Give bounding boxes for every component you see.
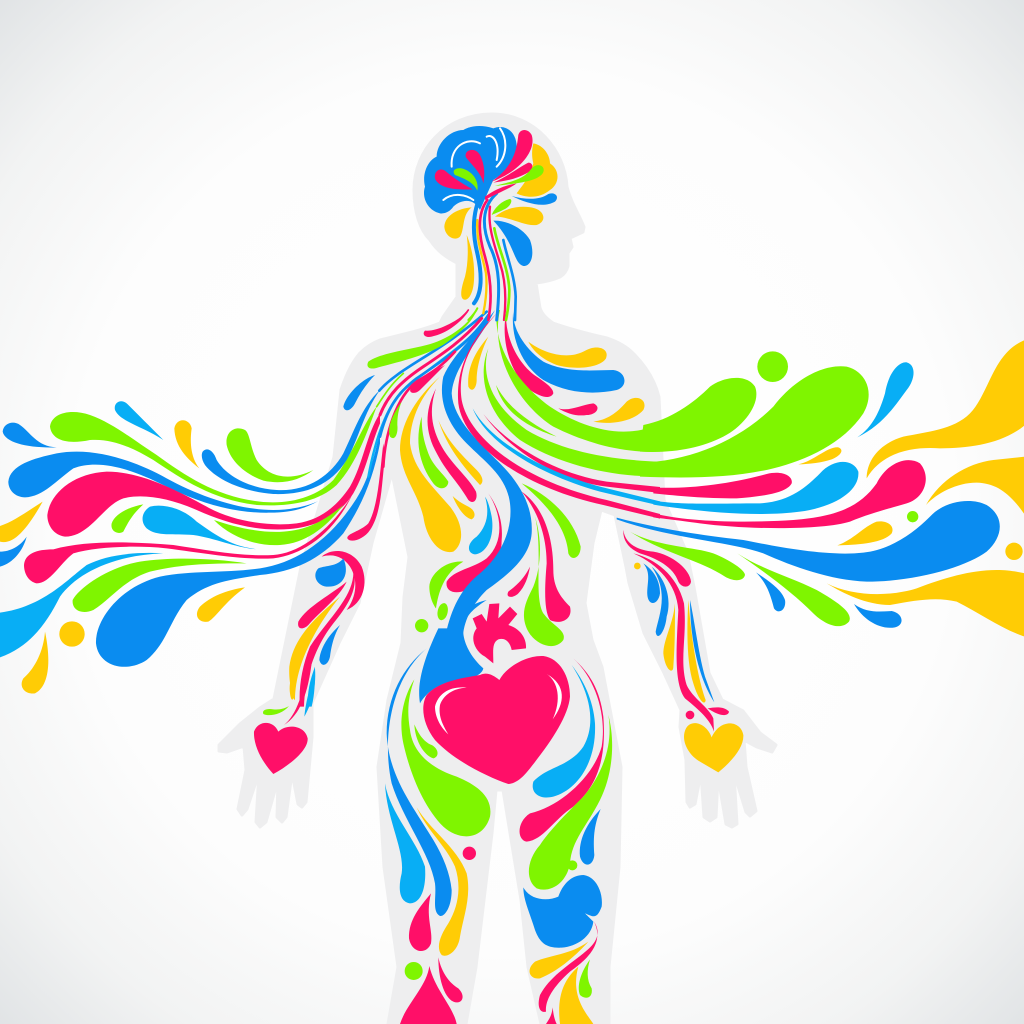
icon: yellow strand to hand <box>290 660 302 700</box>
heart and lower body <box>385 600 612 1024</box>
right forearm and hand <box>623 530 743 772</box>
torso streams <box>343 310 660 650</box>
brain and neck strands <box>424 126 557 320</box>
splash: yellow top right <box>867 340 1024 478</box>
splash: large blue drop <box>96 430 380 667</box>
main blue stream <box>437 310 532 650</box>
left forearm strands <box>322 551 365 610</box>
splash: green stream two <box>640 366 869 477</box>
icon: aorta <box>473 603 526 663</box>
icon: pink heart <box>254 723 308 774</box>
neck strands <box>458 190 516 320</box>
splash: pink stream <box>653 460 926 528</box>
left leg drops <box>385 648 490 1024</box>
icon: yellow heart <box>684 723 743 772</box>
splash: green stream one <box>640 378 756 452</box>
icon: heart atrium <box>419 600 487 703</box>
icon: large pink heart <box>423 656 570 784</box>
left shoulder strands <box>343 310 488 541</box>
splash: large blue stream <box>617 501 1000 582</box>
brain <box>424 126 557 300</box>
splash: blue light drop top <box>115 401 163 440</box>
splash: blue stream <box>8 452 318 513</box>
splash: green top stream <box>50 407 377 505</box>
chest drops <box>389 365 502 632</box>
right forearm strands <box>623 530 691 587</box>
right stream roots <box>458 310 660 519</box>
splash: green drop <box>226 428 313 482</box>
body silhouette <box>219 114 776 1024</box>
left hand heart group <box>254 660 315 774</box>
splash: pink long stream <box>24 496 352 583</box>
left wing splashes <box>0 390 380 707</box>
splash: light blue lower left <box>0 553 163 657</box>
right chest drops <box>468 310 645 646</box>
right wing splashes <box>617 340 1024 637</box>
splash: yellow lower right <box>827 570 1024 637</box>
right leg drops <box>520 658 612 1024</box>
splash: large pink stream <box>47 413 380 537</box>
